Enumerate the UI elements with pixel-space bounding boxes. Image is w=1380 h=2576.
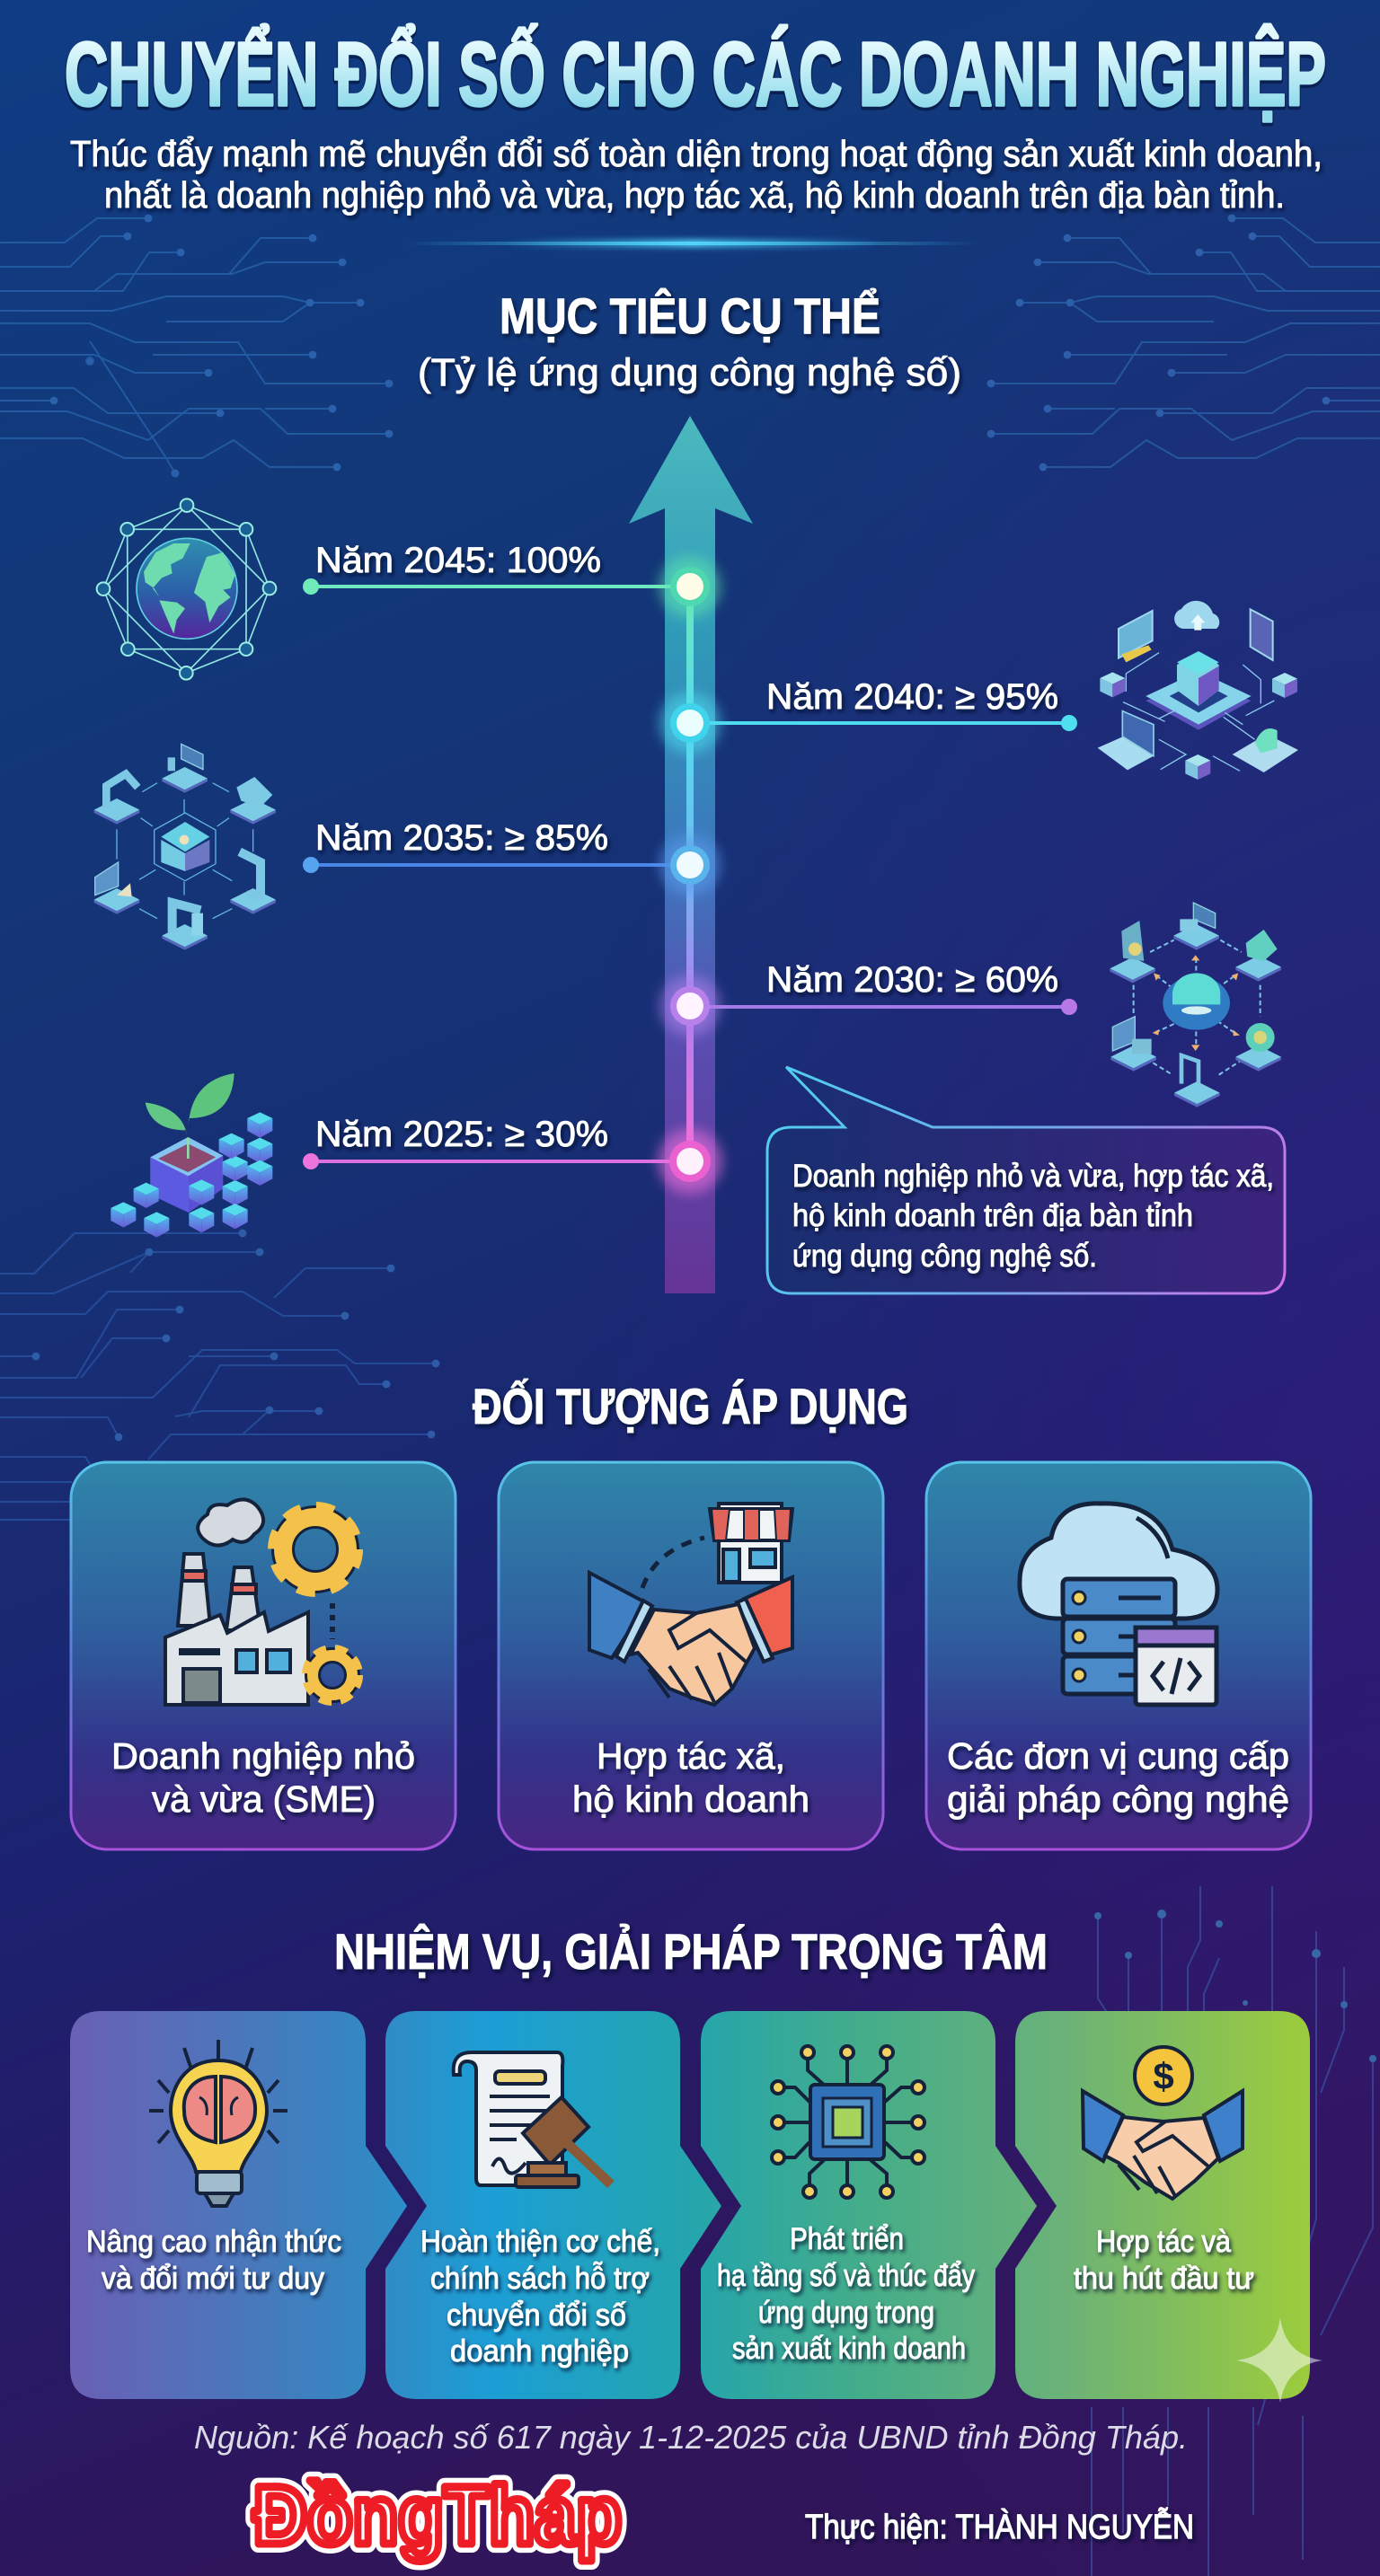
- timeline: year 2035: Năm 2035: ≥ 85%: [315, 818, 608, 858]
- panel: step 2: chuyển đổi số: [447, 2298, 626, 2333]
- panel: step 1: Nâng cao nhận thức: [86, 2225, 341, 2259]
- icon: digital network hexagon: [1110, 903, 1281, 1107]
- panel: step 1: [70, 2011, 407, 2399]
- panel: cooperative card: [499, 1462, 883, 1849]
- panel: technology providers card: Các đơn vị cung cấp: [947, 1735, 1289, 1777]
- growth arrow: [629, 416, 753, 1293]
- timeline: year 2045: Năm 2045: 100%: [315, 541, 601, 580]
- icon: handshake with shop: [589, 1504, 792, 1705]
- icon: smart factory hexagon: [94, 744, 276, 950]
- heading: specific targets: MỤC TIÊU CỤ THỂ: [500, 287, 880, 344]
- callout: hộ kinh doanh trên địa bàn tỉnh: [792, 1198, 1193, 1233]
- panel: step 3: hạ tầng số và thúc đẩy: [717, 2259, 975, 2293]
- divider glow: [404, 239, 977, 248]
- source note: Nguồn: Kế hoạch số 617 ngày 1-12-2025 của UBND tỉnh Đồng Tháp.: [194, 2419, 1188, 2456]
- logo: ĐồngTháp: [253, 2470, 622, 2562]
- timeline: year 2045: [303, 541, 721, 617]
- circuit pattern lower-left: [0, 1233, 436, 1520]
- circuit pattern lower-right: [1092, 1886, 1376, 2576]
- panel: step 3: [701, 2011, 1037, 2399]
- icon: factory and gears: [165, 1499, 359, 1705]
- panel: step 4: thu hút đầu tư: [1074, 2262, 1254, 2296]
- panel: cooperative card: Hợp tác xã,: [597, 1735, 785, 1777]
- circuit pattern top-right: [991, 218, 1380, 467]
- panel: step 1: và đổi mới tư duy: [102, 2262, 324, 2296]
- icon: brain light bulb: [149, 2040, 288, 2206]
- panel: technology providers card: [926, 1462, 1311, 1849]
- timeline: year 2030: [659, 960, 1077, 1037]
- timeline: year 2035: [303, 818, 721, 895]
- timeline: year 2030: Năm 2030: ≥ 60%: [766, 960, 1058, 1000]
- panel: step 2: [385, 2011, 721, 2399]
- icon: investment handshake and coin: $: [1153, 2055, 1174, 2097]
- callout: [767, 1067, 1285, 1293]
- panel: step 3: Phát triển: [790, 2222, 904, 2256]
- timeline: year 2025: [303, 1115, 722, 1194]
- callout: ứng dụng công nghệ số.: [792, 1239, 1097, 1274]
- timeline: year 2040: [659, 677, 1077, 754]
- timeline: year 2040: Năm 2040: ≥ 95%: [766, 677, 1058, 717]
- subtitle: [70, 133, 1322, 216]
- icon: cloud servers and code window: [1020, 1504, 1217, 1705]
- icon: server cloud network: [1098, 601, 1298, 780]
- panel: step 4: Hợp tác và: [1096, 2225, 1231, 2259]
- panel: step 4: [1015, 2011, 1310, 2399]
- icon: investment handshake and coin: [1083, 2047, 1243, 2199]
- logo: ĐồngTháp: [253, 2470, 622, 2562]
- callout: Doanh nghiệp nhỏ và vừa, hợp tác xã,: [792, 1159, 1274, 1194]
- icon: sprout on data cubes: [111, 1073, 272, 1238]
- heading: applicable subjects: ĐỐI TƯỢNG ÁP DỤNG: [473, 1378, 908, 1434]
- subtitle: Thúc đẩy mạnh mẽ chuyển đổi số toàn diện trong hoạt động sản xuất kinh doanh,: [70, 133, 1322, 174]
- heading: key tasks: NHIỆM VỤ, GIẢI PHÁP TRỌNG TÂM: [334, 1923, 1048, 1980]
- panel: step 3: ứng dụng trong: [758, 2296, 934, 2330]
- heading: specific targets: [418, 287, 961, 394]
- panel: step 2: doanh nghiệp: [450, 2334, 629, 2369]
- credit: Thực hiện: THÀNH NGUYỄN: [805, 2507, 1194, 2546]
- subtitle: nhất là doanh nghiệp nhỏ và vừa, hợp tác xã, hộ kinh doanh trên địa bàn tỉnh.: [104, 174, 1285, 216]
- panel: SME card: [71, 1462, 456, 1849]
- timeline: year 2025: Năm 2025: ≥ 30%: [315, 1115, 608, 1154]
- panel: SME card: Doanh nghiệp nhỏ: [111, 1735, 415, 1777]
- circuit pattern top-left: [0, 218, 389, 473]
- panel: step 2: Hoàn thiện cơ chế,: [420, 2225, 660, 2259]
- panel: step 2: chính sách hỗ trợ: [430, 2262, 650, 2296]
- icon: microchip: [772, 2046, 924, 2198]
- panel: step 3: sản xuất kinh doanh: [732, 2332, 966, 2366]
- panel: technology providers card: giải pháp công nghệ: [947, 1778, 1289, 1820]
- heading: specific targets: (Tỷ lệ ứng dụng công nghệ số): [418, 351, 961, 394]
- sparkle: [1236, 2317, 1322, 2403]
- icon: legal document and gavel: [454, 2052, 611, 2187]
- panel: SME card: và vừa (SME): [152, 1778, 376, 1820]
- panel: cooperative card: hộ kinh doanh: [572, 1778, 809, 1820]
- icon: network globe: [97, 498, 276, 680]
